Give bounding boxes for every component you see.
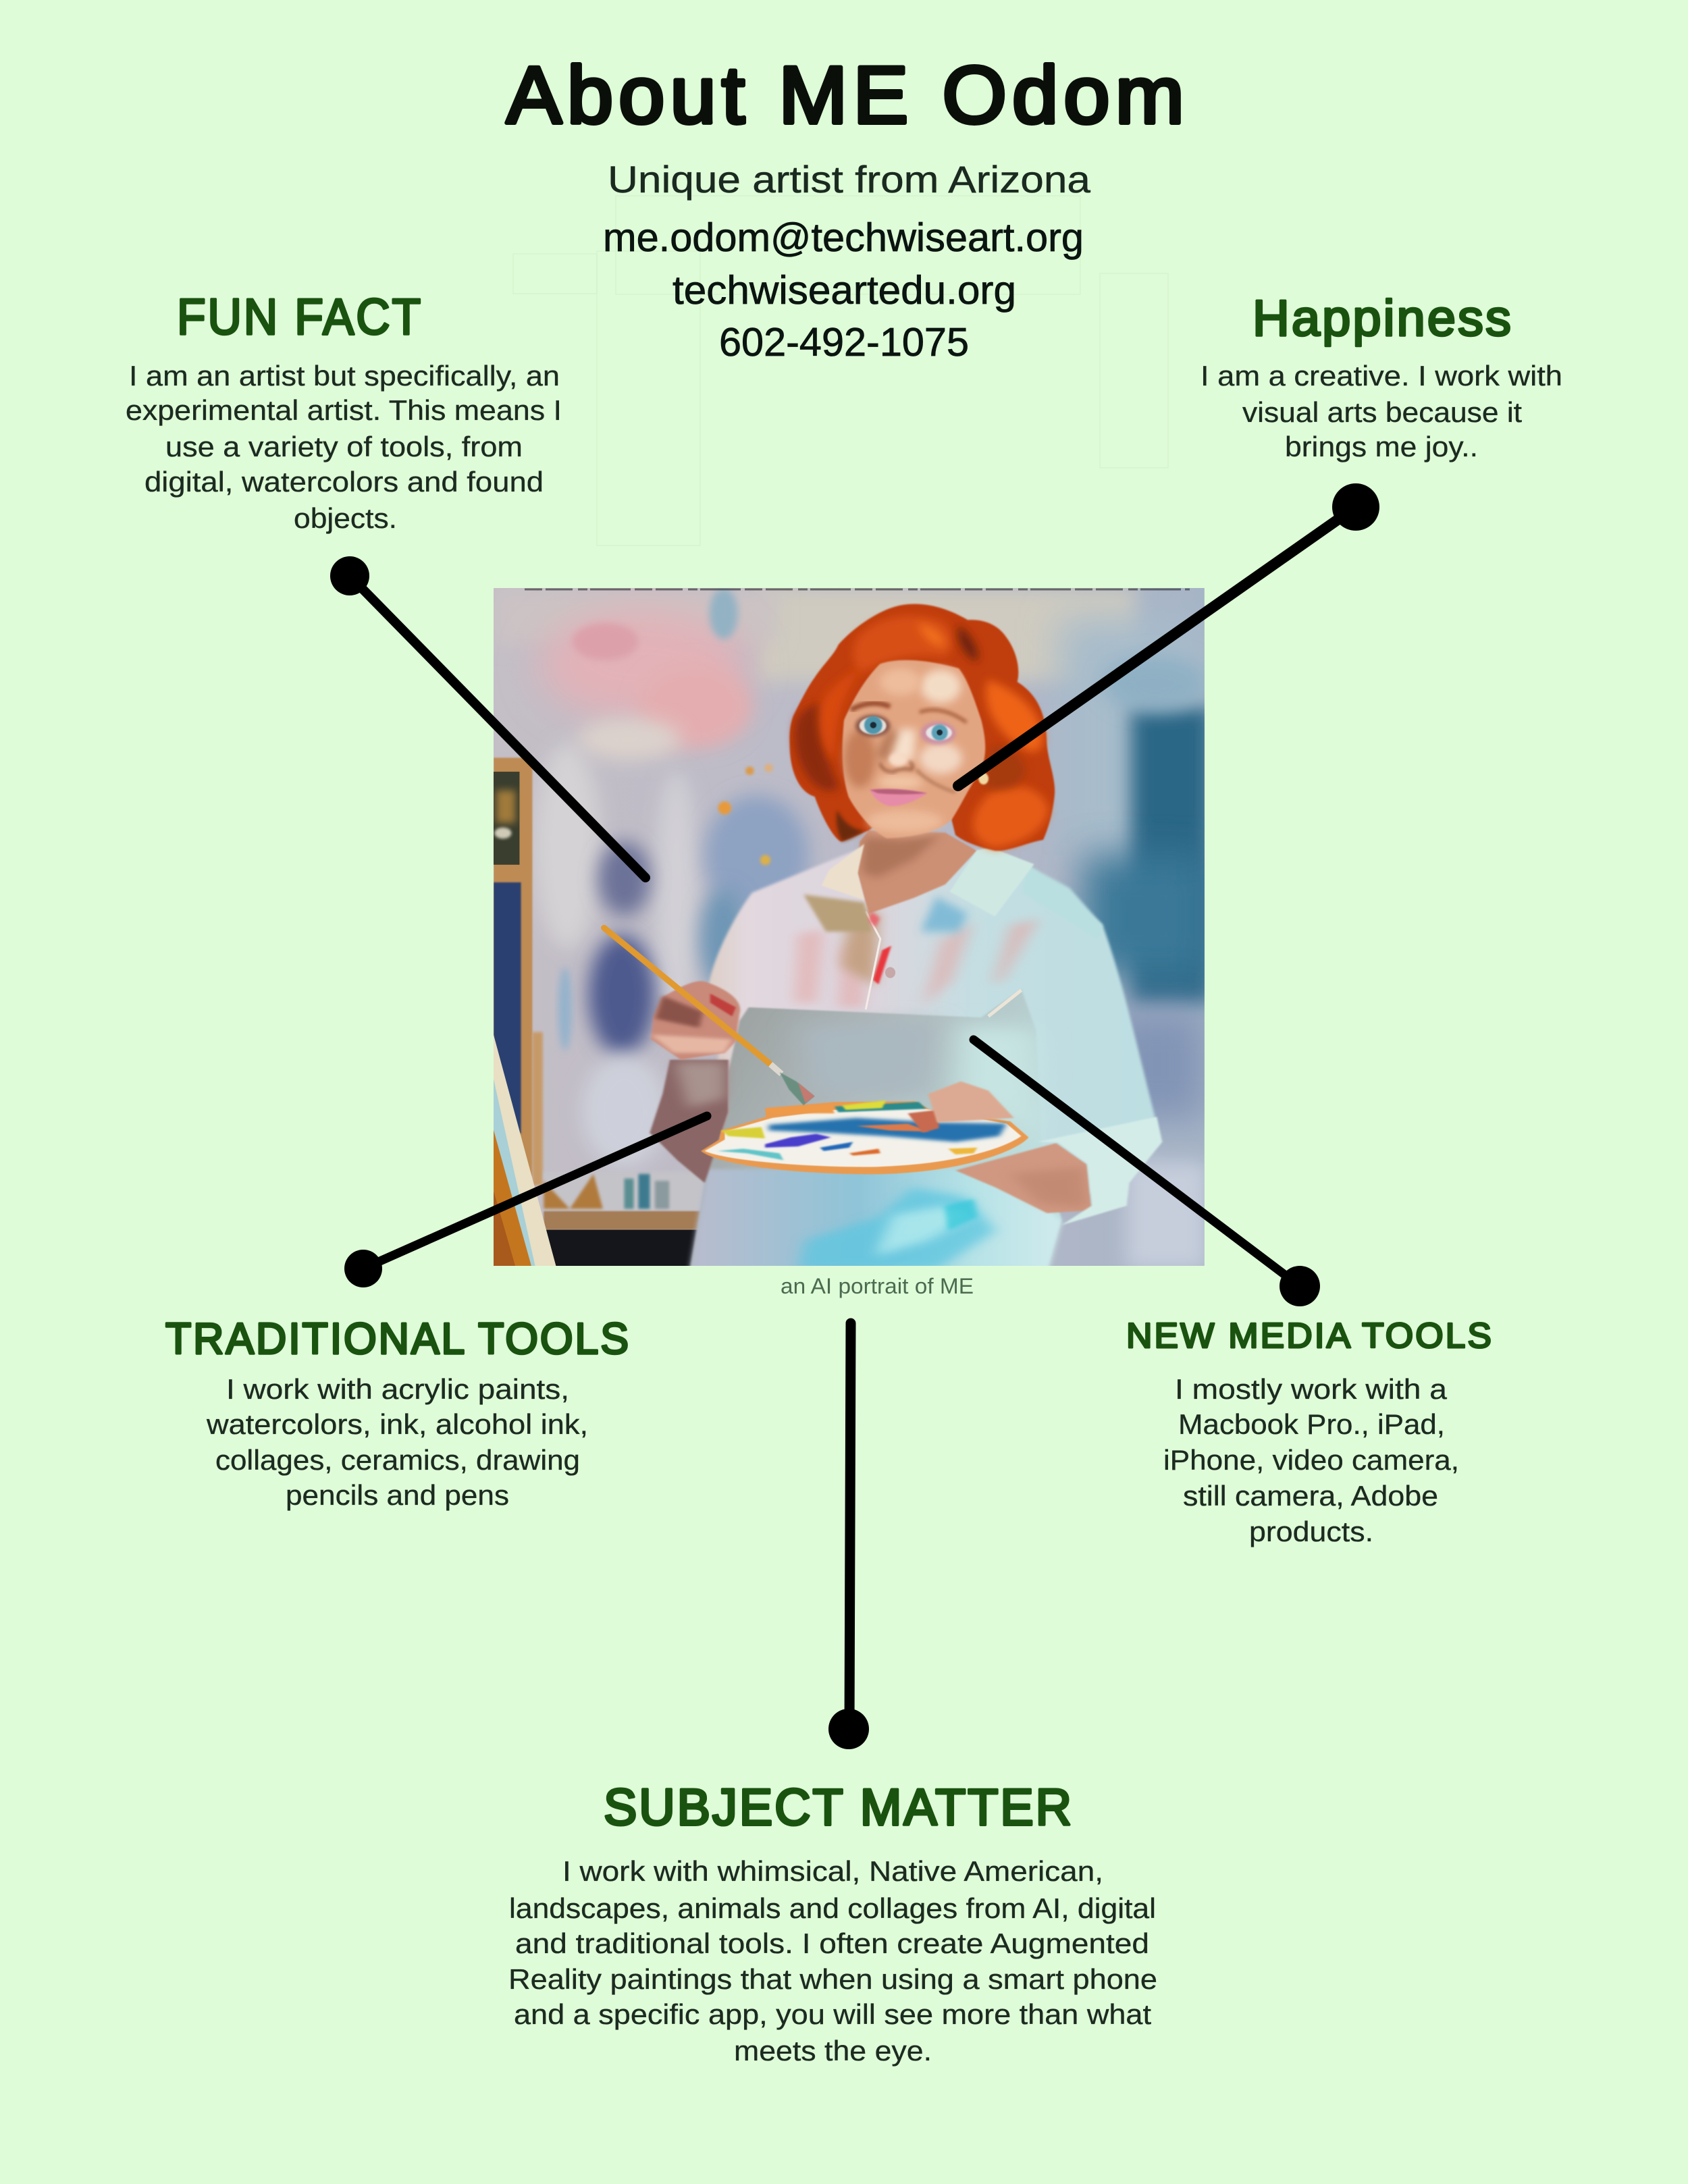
- heading: happiness: Happiness: [1252, 290, 1513, 346]
- eyes: [851, 703, 967, 745]
- caption: an AI portrait of ME: [781, 1274, 974, 1298]
- text: new media tools body: [1163, 1373, 1459, 1547]
- earring: [978, 773, 988, 784]
- cropped text fragment at image top: [525, 589, 1190, 590]
- heading: fun fact: FUN FACT: [177, 288, 423, 345]
- text: happiness body: brings me joy..: [1285, 431, 1478, 462]
- shirt paint streaks: [794, 918, 1040, 1007]
- neck: [858, 830, 977, 913]
- contact details: [603, 215, 1084, 365]
- text: happiness body: [1201, 360, 1562, 462]
- text: traditional tools body: collages, ceramics, drawing: [215, 1444, 580, 1476]
- text: new media tools body: products.: [1249, 1516, 1373, 1547]
- text: new media tools body: Macbook Pro., iPad,: [1178, 1408, 1445, 1440]
- contact details: me.odom@techwiseart.org: [603, 215, 1084, 260]
- paintbrush: [604, 928, 814, 1105]
- collars: [822, 844, 864, 900]
- figure: torso, apron, palette, arms: [604, 911, 1162, 1269]
- shelf with jars: [542, 1172, 544, 1184]
- text: traditional tools body: I work with acrylic paints,: [226, 1373, 569, 1405]
- text: fun fact body: experimental artist. This means I: [126, 394, 562, 426]
- text: happiness body: I am a creative. I work with: [1201, 360, 1562, 392]
- text: fun fact body: I am an artist but specifically, an: [129, 360, 560, 392]
- text: subject matter body: I work with whimsical, Native American,: [562, 1855, 1103, 1887]
- panel: traditional tools: [165, 1314, 631, 1511]
- portrait image: [494, 588, 1211, 1269]
- text: subject matter body: [508, 1855, 1157, 2067]
- text: happiness body: visual arts because it: [1242, 396, 1522, 428]
- text: traditional tools body: watercolors, ink, alcohol ink,: [206, 1408, 588, 1440]
- text: subject matter body: landscapes, animals and collages from AI, digital: [509, 1892, 1156, 1924]
- contact details: 602-492-1075: [719, 320, 969, 365]
- left forearm and glove: [650, 1060, 729, 1183]
- figure: shirt body: [691, 846, 1159, 1195]
- text: fun fact body: [126, 360, 562, 534]
- wall frame: [494, 757, 532, 1176]
- text: fun fact body: objects.: [294, 502, 397, 534]
- text: subject matter body: Reality paintings that when using a smart phone: [508, 1963, 1157, 1995]
- right forearm: [955, 1143, 1092, 1213]
- painting hand: [651, 981, 740, 1060]
- text: fun fact body: digital, watercolors and found: [144, 466, 544, 498]
- text: traditional tools body: [206, 1373, 588, 1511]
- heading: new media tools: NEW MEDIA TOOLS: [1126, 1316, 1494, 1356]
- panel: fun fact: [126, 288, 562, 534]
- lips: [870, 789, 927, 806]
- heading: traditional tools: TRADITIONAL TOOLS: [165, 1314, 631, 1363]
- connector: fun fact: [330, 556, 645, 878]
- rolled sleeve cuff: [1038, 1117, 1162, 1225]
- text: traditional tools body: pencils and pens: [286, 1479, 509, 1511]
- text: fun fact body: use a variety of tools, from: [165, 431, 523, 462]
- figure: head and hair: [789, 604, 1055, 932]
- text: new media tools body: still camera, Adobe: [1183, 1480, 1438, 1512]
- apron: [690, 989, 1061, 1269]
- connector: traditional tools: [344, 1116, 707, 1287]
- title: About ME Odom: [506, 50, 1190, 140]
- text: subject matter body: meets the eye.: [734, 2035, 932, 2067]
- connector: new media tools: [974, 1040, 1320, 1306]
- wall background and studio: [494, 588, 1211, 1269]
- easel and canvas: [494, 1034, 556, 1266]
- text: subject matter body: and a specific app, you will see more than what: [514, 1998, 1151, 2030]
- connector: happiness: [958, 483, 1379, 786]
- subtitle: Unique artist from Arizona: [608, 158, 1091, 201]
- text: new media tools body: iPhone, video camera,: [1163, 1444, 1459, 1476]
- text: new media tools body: I mostly work with a: [1175, 1373, 1448, 1405]
- face: [843, 660, 985, 838]
- text: subject matter body: and traditional tools. I often create Augmented: [515, 1927, 1149, 1959]
- contact details: techwiseartedu.org: [672, 268, 1016, 313]
- hair mass: [789, 604, 1055, 851]
- palette: [701, 1100, 1028, 1174]
- panel: new media tools: [1126, 1316, 1494, 1547]
- apron skirt with cyan paint: [690, 1169, 1061, 1269]
- connector: subject matter: [828, 1323, 869, 1749]
- palette hand: [928, 1082, 1014, 1123]
- panel: happiness: [1201, 290, 1562, 462]
- panel: subject matter: [508, 1779, 1157, 2067]
- heading: subject matter: SUBJECT MATTER: [604, 1779, 1074, 1836]
- nose: [880, 762, 913, 772]
